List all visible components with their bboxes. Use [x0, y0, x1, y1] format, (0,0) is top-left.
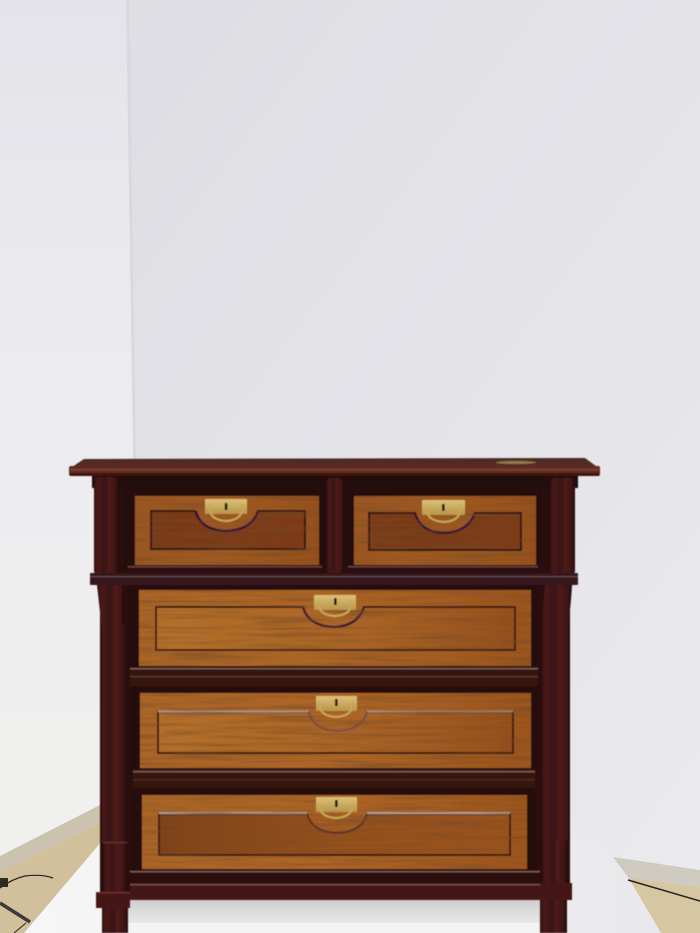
chest of drawers [69, 458, 600, 933]
right upper pilaster [550, 478, 575, 574]
top-right drawer [345, 488, 542, 569]
top front edge [69, 466, 600, 476]
left foot [96, 842, 130, 933]
rail under drawer 4 [133, 769, 535, 788]
rail under drawer 3 [130, 667, 538, 686]
drawer 4 [130, 686, 538, 770]
left lower pilaster [97, 585, 127, 842]
top surface [69, 458, 600, 469]
centre upper pilaster [326, 478, 344, 573]
band below top [92, 476, 578, 488]
right foot [540, 840, 572, 933]
drawer 5 [133, 788, 535, 872]
right lower pilaster [541, 585, 572, 842]
drawer 3 [128, 585, 538, 669]
brass handle [316, 696, 357, 717]
brass handle [314, 595, 356, 616]
brass handle [316, 797, 357, 818]
mid cornice rail [90, 573, 578, 585]
left upper pilaster [94, 477, 119, 574]
cabinet carcass [100, 474, 570, 900]
white display plinth [24, 839, 661, 933]
bottom plinth rail [130, 870, 540, 883]
brass hardware on top [496, 461, 536, 464]
brass handle [205, 499, 247, 521]
top-left drawer [124, 488, 326, 569]
brass handle [422, 500, 465, 522]
